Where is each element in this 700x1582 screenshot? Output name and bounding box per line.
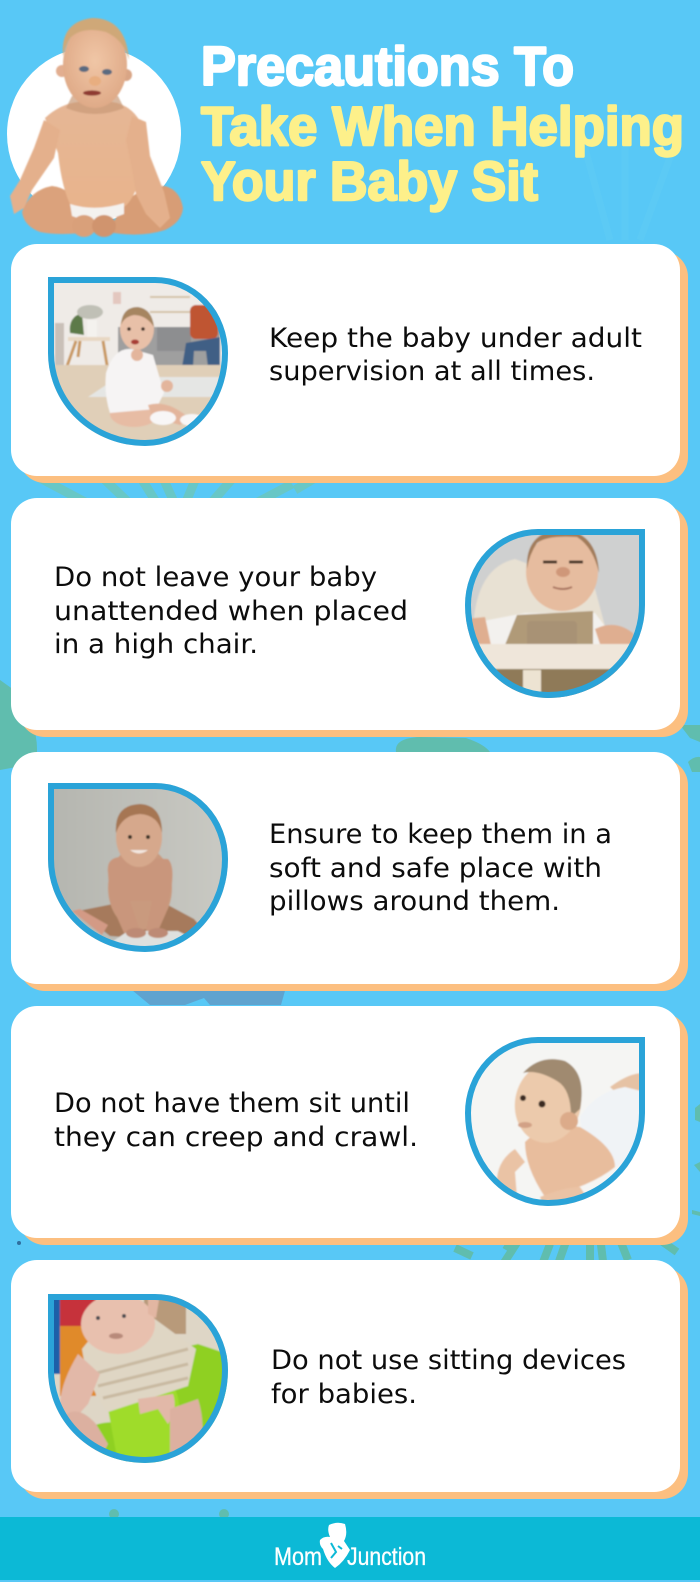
photo: baby in high chair xyxy=(465,529,645,699)
text: creep and crawl: Do not have them sit until xyxy=(54,1088,410,1119)
card xyxy=(11,244,680,476)
card shadow xyxy=(19,759,688,991)
text: high chair: in a high chair. xyxy=(54,629,258,660)
card shadow xyxy=(19,1013,688,1245)
panel: soft and safe place xyxy=(11,752,688,991)
photo: baby on tummy xyxy=(465,1037,645,1209)
card xyxy=(11,498,680,730)
text: supervision: supervision at all times. xyxy=(269,356,595,387)
text: high chair: Do not leave your baby xyxy=(54,562,377,593)
text: supervision: Keep the baby under adult xyxy=(269,323,642,354)
card xyxy=(11,752,680,984)
title line 3: Your Baby Sit xyxy=(201,150,538,212)
photo: smiling sitting baby xyxy=(48,783,228,955)
logo mother and child icon xyxy=(320,1523,350,1568)
text: creep and crawl: they can creep and crawl. xyxy=(54,1122,418,1153)
text: high chair: unattended when placed xyxy=(54,596,408,627)
card shadow xyxy=(19,251,688,483)
card shadow xyxy=(19,1267,688,1499)
title line 1: Precautions To xyxy=(201,35,574,97)
text: soft place: soft and safe place with xyxy=(269,853,602,884)
text: soft place: Ensure to keep them in a xyxy=(269,819,612,850)
text: soft place: pillows around them. xyxy=(269,886,560,917)
photo: baby on floor with adult xyxy=(48,277,228,446)
card xyxy=(11,1006,680,1238)
logo: MomJunction xyxy=(274,1523,426,1571)
text: sitting devices xyxy=(271,1345,626,1410)
title xyxy=(201,35,684,212)
logo wordmark xyxy=(274,1543,426,1571)
baby figure xyxy=(10,18,183,237)
panel: adult supervision xyxy=(11,244,688,483)
hero baby xyxy=(7,18,183,237)
panel: sitting devices xyxy=(11,1260,688,1499)
text: high chair xyxy=(54,562,408,660)
white circle xyxy=(7,47,181,221)
photo: baby in green seat xyxy=(48,1294,228,1463)
panel: high chair xyxy=(11,498,688,737)
panel: creep and crawl xyxy=(11,1006,688,1245)
logo wordmark: Junction xyxy=(347,1543,426,1571)
title line 2: Take When Helping xyxy=(201,95,684,157)
text: sitting devices: Do not use sitting devices xyxy=(271,1345,626,1376)
footer band xyxy=(0,1517,700,1580)
text: creep and crawl xyxy=(54,1088,418,1153)
text: supervision xyxy=(269,323,642,387)
card xyxy=(11,1260,680,1492)
text: sitting devices: for babies. xyxy=(271,1379,417,1410)
card shadow xyxy=(19,505,688,737)
text: soft place xyxy=(269,819,612,917)
logo wordmark: Mom xyxy=(274,1543,322,1571)
